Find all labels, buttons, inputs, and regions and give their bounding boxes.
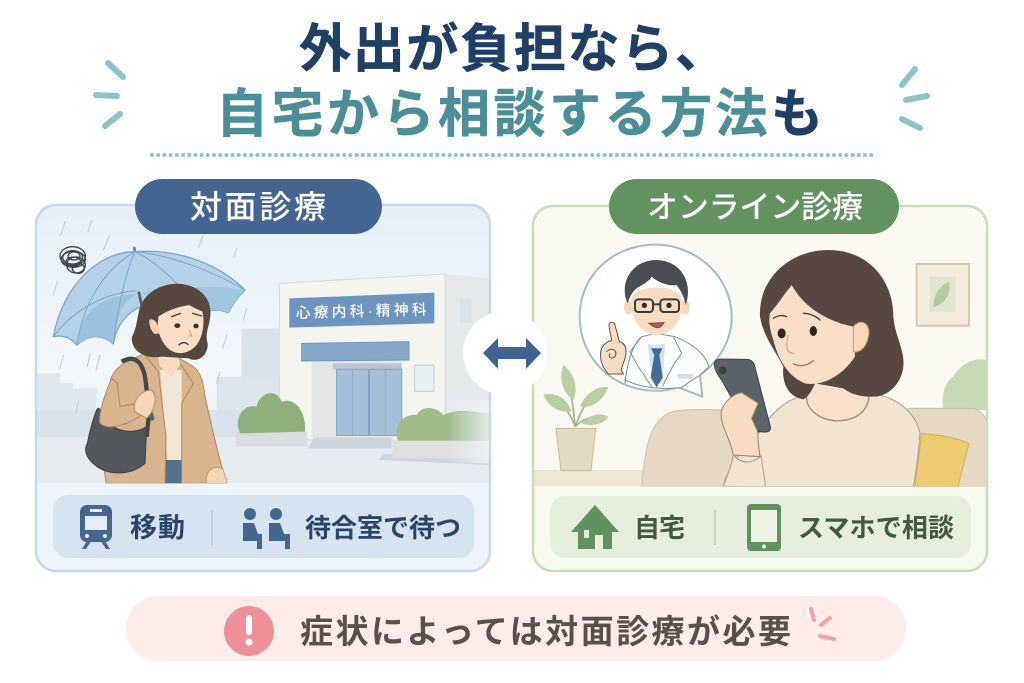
pill: online heading — [609, 179, 899, 234]
item: consult by smartphone: スマホで相談 — [798, 513, 954, 543]
icon: gloom scribble — [60, 247, 85, 273]
shoulder bag — [86, 359, 149, 473]
rain — [53, 220, 247, 413]
clinic building — [279, 274, 490, 465]
note text: 症状によっては対面診療が必要 — [300, 613, 791, 650]
hair — [760, 250, 904, 399]
icon: accent marks — [811, 609, 834, 639]
face — [158, 305, 203, 353]
panel: online consultation — [533, 203, 987, 571]
title line 1: 外出が負担なら、 — [299, 21, 727, 79]
umbrella — [53, 248, 245, 345]
face — [769, 285, 855, 384]
icon: exclamation — [224, 606, 274, 656]
pill: in-person heading — [135, 179, 382, 234]
illustration: woman walking to clinic in the rain — [35, 203, 490, 483]
doctor — [601, 260, 709, 389]
sofa and cushion — [642, 408, 987, 487]
item: home: 自宅 — [634, 513, 685, 543]
clinic sign — [289, 293, 434, 328]
potted plant — [533, 365, 647, 487]
pointing hand — [601, 322, 626, 374]
pill: in-person heading: 対面診療 — [190, 189, 326, 225]
smartphone — [714, 359, 770, 432]
icon: smartphone — [747, 504, 781, 551]
smiling face features — [773, 313, 820, 366]
clinic sign: 心療内科·精神科 — [296, 301, 427, 322]
label bar: in-person — [53, 495, 474, 558]
title — [216, 21, 823, 144]
sweater — [723, 393, 920, 487]
shrubs and planters — [236, 393, 490, 458]
label bar: online — [550, 496, 971, 558]
side plant — [943, 359, 987, 410]
item: travel: 移動 — [130, 513, 185, 543]
icon: train — [80, 505, 112, 549]
speech bubble with doctor — [580, 245, 732, 397]
sad face features — [172, 313, 202, 345]
callout: note — [126, 596, 906, 661]
pill: online heading: オンライン診療 — [647, 190, 863, 225]
panel: in-person consultation — [35, 203, 490, 571]
coat — [100, 353, 227, 483]
icon: right emphasis marks — [902, 69, 927, 128]
hand and cuff — [721, 393, 766, 487]
neck — [806, 384, 870, 422]
main woman smiling — [714, 250, 920, 487]
picture frame — [917, 264, 969, 326]
icon: people waiting — [243, 508, 290, 549]
hair back — [132, 284, 210, 360]
icon: house — [571, 505, 619, 549]
icon: left emphasis marks — [96, 63, 123, 126]
arrow: compare — [463, 311, 547, 395]
item: waiting room: 待合室で待つ — [305, 513, 461, 543]
title line 2: 自宅から相談する方法も — [216, 86, 823, 144]
illustration: woman talking to doctor by smartphone at home — [534, 244, 986, 487]
woman in trench coat — [86, 284, 227, 483]
arm and hand — [100, 378, 155, 427]
